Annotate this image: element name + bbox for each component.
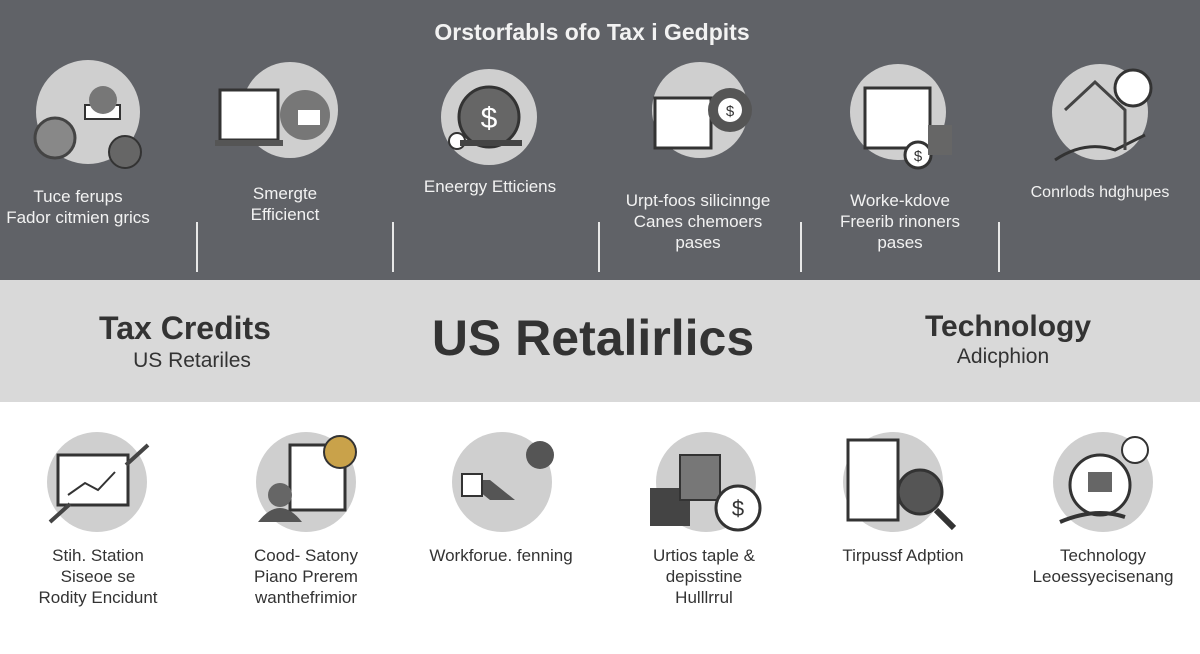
icon: person with board	[256, 432, 356, 532]
icon: gears and person	[35, 60, 141, 168]
text: Canes chemoers	[634, 212, 762, 231]
middle grey band	[0, 280, 1200, 402]
icon: building and dollar	[650, 432, 760, 532]
text: Tirpussf Adption	[842, 546, 964, 565]
icon: handshake	[452, 432, 554, 532]
text: Eneergy Etticiens	[424, 177, 556, 196]
text: Smergte	[253, 184, 317, 203]
text: Urtios taple &	[653, 546, 755, 565]
text: Conrlods hdghupes	[1031, 184, 1169, 201]
bottom labels: Siseoe se	[61, 567, 135, 586]
text: depisstine	[666, 567, 742, 586]
icon: hand with house	[1052, 64, 1151, 160]
bottom labels	[38, 546, 158, 607]
text: Urpt-foos silicinnge	[626, 191, 770, 210]
text: Cood- Satony	[254, 546, 358, 565]
text: Freerib rinoners	[840, 212, 960, 231]
icon: cart hand	[1053, 432, 1153, 532]
text: Adicphion	[957, 345, 1049, 368]
text: Technology	[1060, 546, 1146, 565]
icon: dollar coin: $	[481, 102, 498, 135]
text: Piano Prerem	[254, 567, 358, 586]
icon: document and gear	[652, 62, 752, 158]
top labels: Fador citmien grics	[6, 208, 150, 227]
divider lines	[196, 222, 198, 272]
icon: laptop chart	[215, 62, 338, 158]
text: pases	[675, 233, 721, 252]
top labels	[6, 187, 150, 227]
text: Hulllrrul	[675, 588, 733, 607]
icon: calendar checklist	[850, 64, 952, 168]
text: Worke-kdove	[850, 191, 950, 210]
text: Efficienct	[251, 205, 319, 224]
icon: calendar checklist: $	[914, 148, 923, 165]
middle headings: Tax Credits	[99, 310, 271, 346]
icon: document magnifier	[843, 432, 954, 532]
text: pases	[877, 233, 923, 252]
icon: dollar coin	[441, 69, 537, 165]
top dark band	[0, 0, 1200, 280]
icon: building and dollar: $	[732, 496, 744, 521]
text: Technology	[925, 310, 1091, 343]
top labels: Tuce ferups	[33, 187, 123, 206]
text: Workforue. fenning	[429, 546, 573, 565]
text: US Retariles	[133, 349, 251, 372]
text: wanthefrimior	[255, 588, 357, 607]
bottom labels: Stih. Station	[52, 546, 144, 565]
title: Orstorfabls ofo Tax i Gedpits	[434, 19, 750, 45]
icon: document and gear: $	[726, 103, 735, 120]
bottom labels: Rodity Encidunt	[38, 588, 158, 607]
icon: monitor arrows	[47, 432, 148, 532]
text: Leoessyecisenang	[1033, 567, 1173, 586]
text: US Retalirlics	[432, 310, 754, 366]
